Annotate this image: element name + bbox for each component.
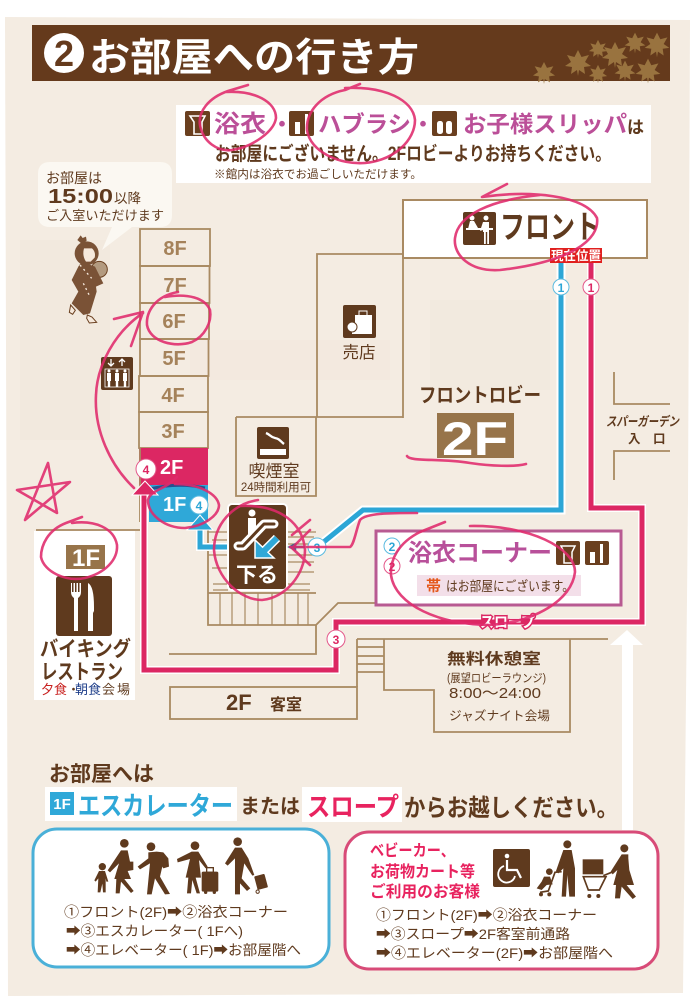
- garden entrance label: [606, 414, 680, 446]
- route instruction: または: [240, 796, 300, 818]
- floor 1F highlighted: 1F: [163, 494, 186, 516]
- marker 1 pink: [583, 279, 599, 295]
- marker 1 pink: 1: [588, 281, 595, 295]
- floor 4F: 4F: [161, 385, 185, 407]
- obi note: はお部屋にございます。: [446, 578, 574, 594]
- blue route: [187, 263, 561, 547]
- speech bubble: [38, 162, 172, 250]
- route instruction: [45, 763, 618, 822]
- 1F tag: 1F: [72, 545, 100, 572]
- notice panel: ・: [271, 112, 293, 137]
- floor 7F: [140, 266, 210, 303]
- floor 5F: 5F: [162, 348, 186, 370]
- slope route steps: ➡④エレベーター(2F)➡お部屋階へ: [376, 945, 613, 961]
- shop: [342, 305, 376, 362]
- floor 6F: [140, 303, 209, 339]
- pink route: [132, 263, 642, 670]
- 2F guest rooms: [170, 687, 357, 719]
- marker 4 pink: [136, 459, 156, 479]
- icon: elevator: [101, 357, 133, 390]
- floor 5F: [140, 339, 208, 376]
- slope route steps: ➡③スロープ➡2F客室前通路: [376, 926, 570, 942]
- floor 8F: [140, 229, 210, 266]
- icon: slippers: [432, 111, 457, 136]
- smoking room: 喫煙室: [248, 462, 300, 481]
- front circle: [455, 184, 597, 270]
- escalator route steps: [64, 904, 301, 958]
- smoking room: [241, 427, 311, 494]
- toothbrush label: ハブラシ: [318, 111, 411, 137]
- 1F restaurant circle: [41, 517, 117, 579]
- buffet restaurant: [34, 531, 135, 700]
- escalator route steps: ➡③エスカレーター( 1Fへ): [66, 923, 243, 939]
- descend label: 下る: [236, 564, 278, 587]
- panel: slope route: [345, 832, 658, 969]
- yukata circle: [200, 85, 276, 150]
- floor 2F highlighted: 2F: [160, 457, 183, 479]
- floor 7F: 7F: [163, 275, 187, 297]
- star: [17, 463, 70, 520]
- meal note: ・: [67, 682, 80, 697]
- marker 2 pink: [384, 558, 400, 574]
- 2F underline: [407, 456, 526, 466]
- restaurant name: バイキング: [40, 637, 131, 661]
- marker 1 blue: [553, 279, 569, 295]
- marker 3 pink: [327, 630, 345, 648]
- title bar: [32, 25, 670, 84]
- arrow to 2F: [132, 481, 158, 495]
- notice panel: は: [627, 118, 644, 137]
- meal note: [41, 682, 130, 697]
- marker 3 blue: 3: [314, 541, 321, 555]
- cross marks at 3: [290, 513, 417, 565]
- meal note: 会場: [102, 682, 130, 697]
- marker 4 blue: 4: [196, 499, 203, 513]
- hand-drawn arrow at escalator: [290, 544, 305, 550]
- stroller note: ご利用のお客様: [370, 882, 480, 901]
- 2F guest rooms: 客室: [270, 696, 302, 714]
- title number: [44, 33, 84, 74]
- meal note: 朝食: [75, 682, 101, 697]
- free lounge: [447, 649, 550, 723]
- floor 8F: 8F: [163, 238, 187, 260]
- yukata label: 浴衣: [214, 111, 266, 138]
- speech bubble: お部屋は: [46, 170, 102, 186]
- buffet restaurant: レストラン: [41, 661, 123, 684]
- shop label: 売店: [342, 343, 376, 362]
- stroller note: ベビーカー、: [370, 841, 455, 860]
- free lounge: 無料休憩室: [447, 649, 541, 668]
- escalator highlight: エスカレーター: [78, 791, 233, 821]
- front desk: [463, 209, 600, 245]
- icon: maple leaves: [533, 33, 669, 84]
- route instruction: お部屋へは: [49, 763, 154, 786]
- marker 1 blue: 1: [558, 281, 565, 295]
- marker 3 blue: [308, 538, 326, 556]
- escalator sign: [228, 504, 287, 590]
- speech bubble: 以降: [114, 191, 141, 206]
- hand-drawn marks: [17, 84, 597, 625]
- obi note: [417, 575, 581, 596]
- slope highlight: スロープ: [307, 792, 399, 822]
- 6F circle: [147, 292, 210, 344]
- notice panel: [176, 105, 651, 183]
- yukata corner: 浴衣コーナー: [408, 540, 552, 567]
- free lounge: 8:00～24:00: [449, 685, 541, 702]
- notice line: お部屋にございません。2Fロビーよりお持ちください。: [215, 142, 611, 165]
- icon: cigarette: [257, 427, 289, 459]
- floor 2F highlighted: [139, 448, 208, 485]
- icon: shopping bag: [343, 305, 376, 338]
- notice footnote: ※館内は浴衣でお過ごしいただけます。: [214, 167, 422, 181]
- marker 2 blue: [384, 538, 400, 554]
- panel: escalator route: [33, 829, 329, 967]
- elevator tower: [139, 229, 210, 522]
- escalator highlight: 1F: [53, 796, 71, 813]
- floor 1F highlighted: [149, 485, 208, 522]
- front lobby: フロントロビー: [419, 384, 541, 407]
- marker 2 blue: 2: [389, 540, 396, 554]
- title number: 2: [54, 33, 74, 74]
- floor 3F: [139, 412, 208, 448]
- floor 3F: 3F: [161, 421, 185, 443]
- icon: yukata: [185, 111, 210, 136]
- escalator circle: [214, 500, 305, 600]
- route number circles: [136, 279, 599, 648]
- floor 4F: [139, 376, 208, 412]
- 2F guest rooms: 2F: [226, 690, 252, 715]
- yukata corner circle: [391, 522, 575, 625]
- yukata corner: [376, 531, 621, 605]
- curved elevator arrow: [96, 312, 143, 488]
- garden entrance label: 入: [628, 432, 641, 446]
- 2F tag: 2F: [442, 412, 508, 465]
- garden entrance label: 口: [653, 432, 666, 446]
- icon: stroller, cart and people: [537, 840, 636, 899]
- current location tag: 現在位置: [551, 248, 601, 263]
- icon: reception: [463, 212, 496, 245]
- meal note: 夕食: [41, 682, 67, 697]
- front label: フロント: [500, 209, 600, 245]
- icon: woman in kimono: [69, 235, 107, 323]
- stroller note: お荷物カート等: [370, 862, 475, 881]
- white entrance arrow: [610, 630, 643, 830]
- free lounge: ジャズナイト会場: [449, 708, 550, 723]
- notice panel: ・: [412, 112, 434, 137]
- speech bubble: 15:00: [48, 186, 113, 208]
- front lobby: [419, 384, 541, 465]
- marker 4 pink: 4: [143, 463, 150, 477]
- marker 3 pink: 3: [333, 633, 340, 647]
- icon: toothbrush: [585, 541, 609, 565]
- floor 6F: 6F: [162, 311, 186, 333]
- icon: yukata: [556, 541, 580, 565]
- free lounge: (展望ロビーラウンジ): [447, 672, 546, 685]
- slope label: スロープ: [480, 614, 535, 631]
- marker 4 blue: [190, 496, 208, 514]
- icon: wheelchair: [493, 849, 530, 887]
- arrow to 1F: [187, 515, 213, 530]
- title text: お部屋への行き方: [89, 37, 419, 80]
- slope route steps: ①フロント(2F)➡②浴衣コーナー: [376, 907, 597, 923]
- marker 2 pink: 2: [389, 560, 396, 574]
- icon: escalator: [238, 510, 277, 558]
- route instruction: からお越しください。: [404, 795, 618, 822]
- slope route steps: [376, 907, 613, 961]
- floor plan walls: [36, 200, 670, 732]
- slippers label: お子様スリッパ: [463, 111, 627, 137]
- escalator highlight: [45, 787, 237, 821]
- toothbrush circle: [307, 84, 415, 163]
- garden entrance label: スパーガーデン: [606, 414, 680, 429]
- escalator route steps: ➡④エレベーター( 1F)➡お部屋階へ: [66, 942, 301, 958]
- icon: fork and knife: [56, 576, 112, 636]
- smoking room: 24時間利用可: [241, 481, 311, 494]
- 1F elevator circle: [148, 477, 219, 528]
- escalator route steps: ①フロント(2F)➡②浴衣コーナー: [64, 904, 288, 920]
- speech bubble: ご入室いただけます: [46, 208, 164, 223]
- icon: toothbrush: [289, 111, 314, 136]
- icon: travellers: [94, 837, 268, 894]
- stroller note: [370, 841, 480, 901]
- obi note: 帯: [426, 578, 441, 595]
